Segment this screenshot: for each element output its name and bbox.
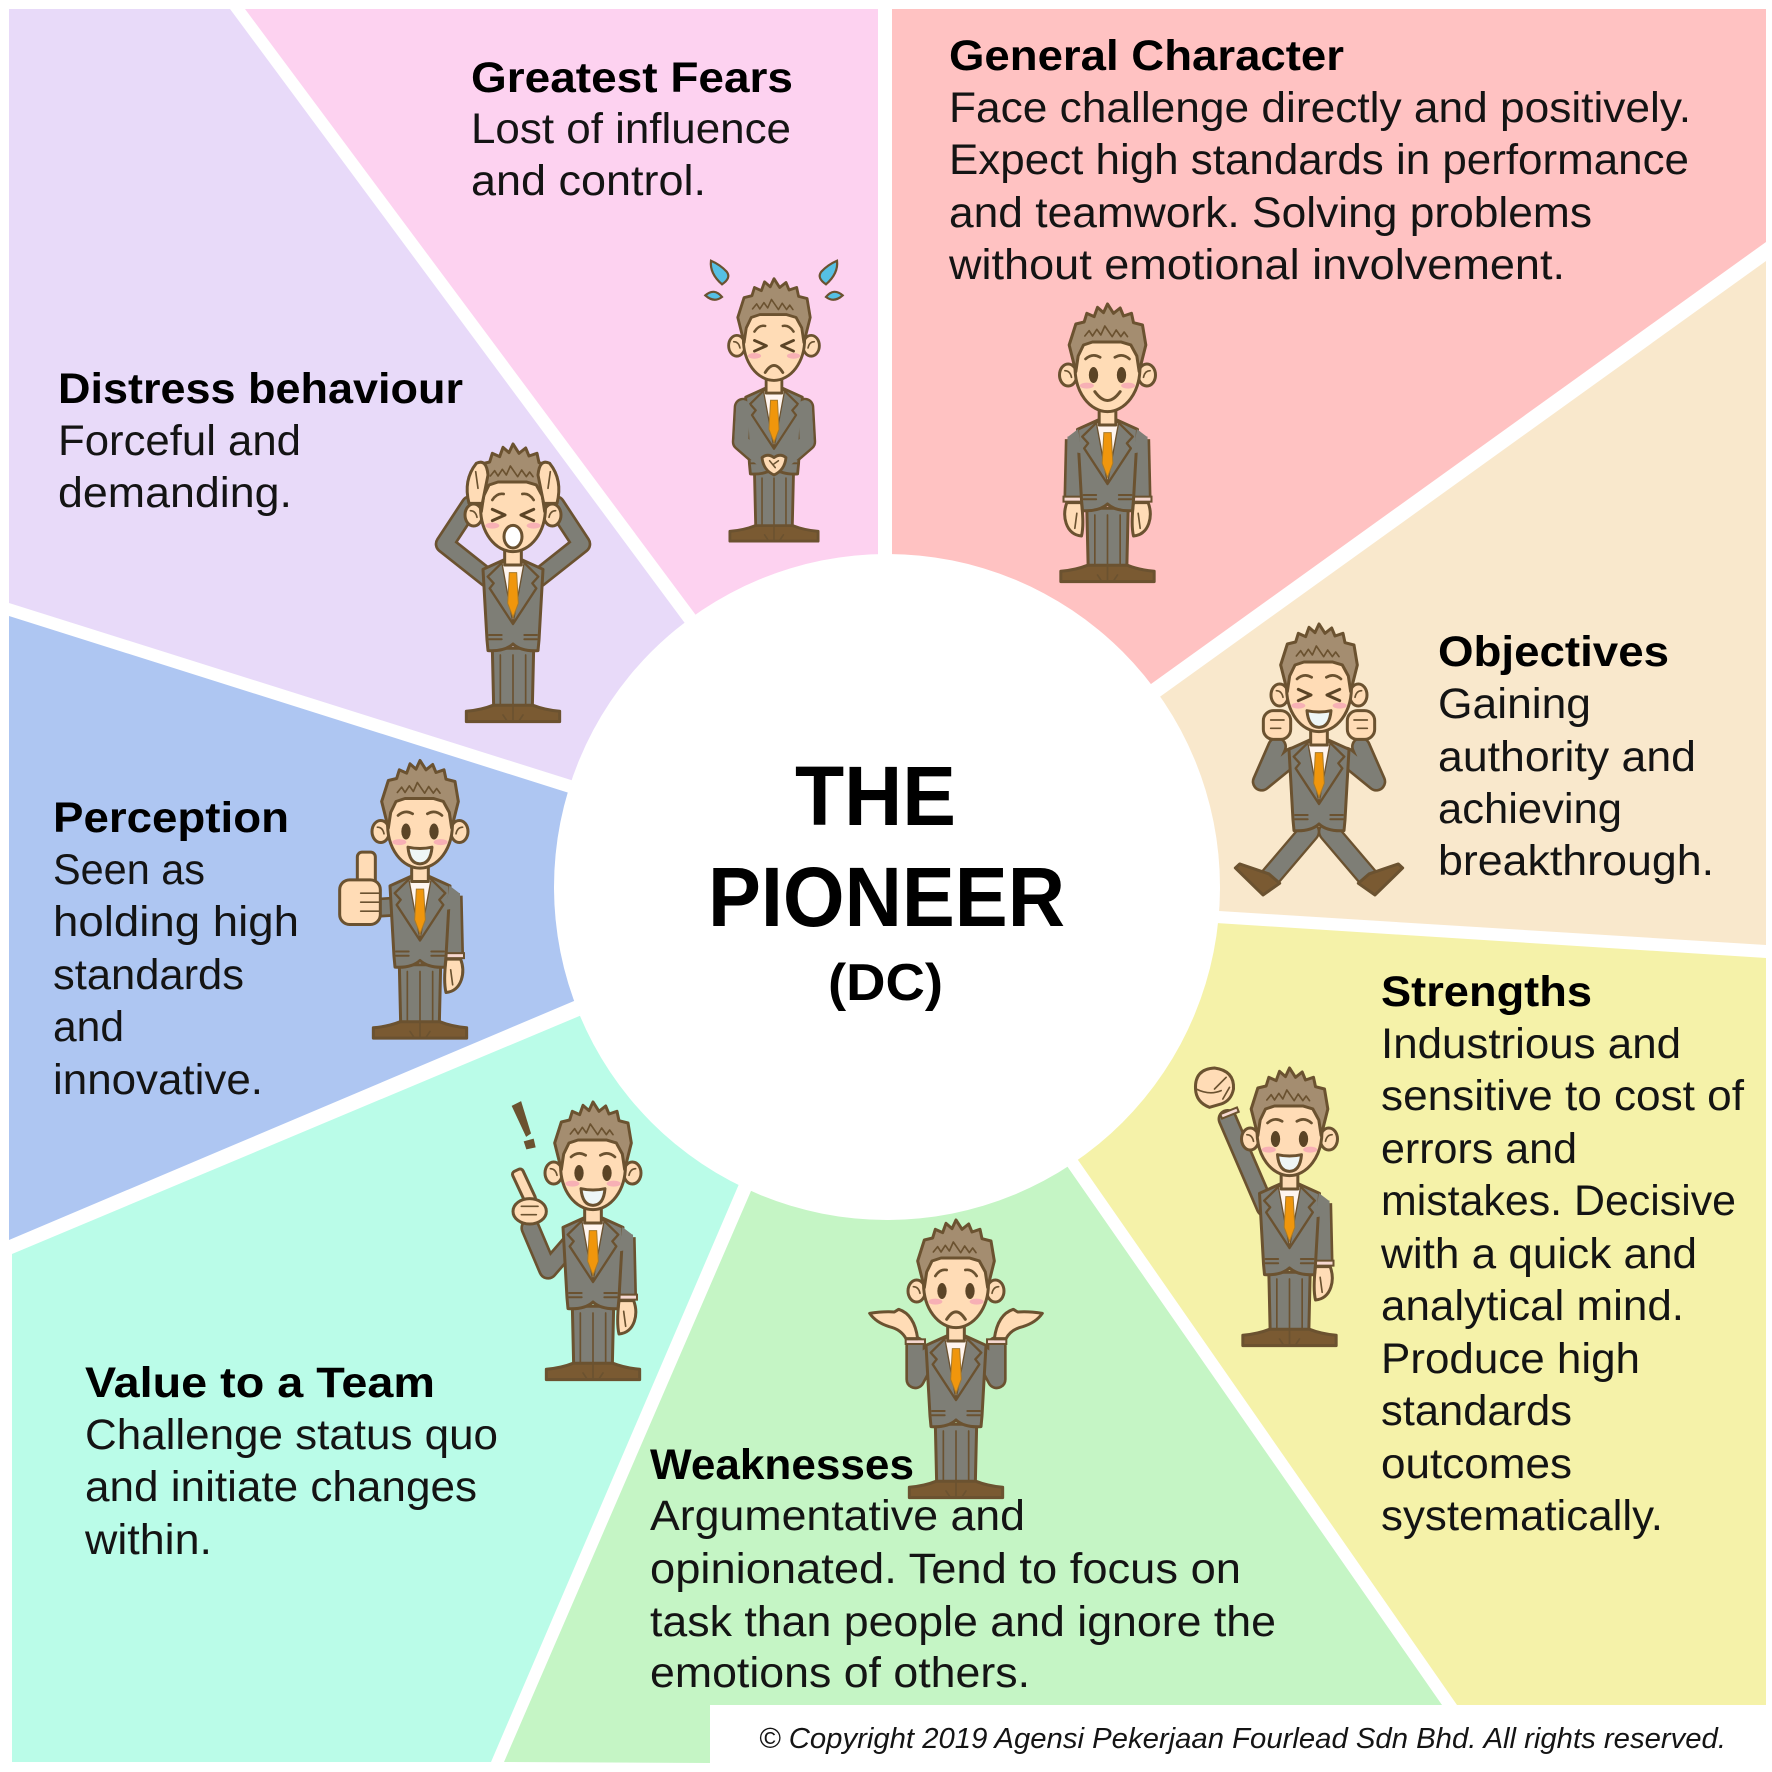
panel: value to a team background xyxy=(12,887,887,1762)
text: strengths: standards xyxy=(1381,1387,1572,1435)
text: greatest fears: and control. xyxy=(471,157,706,205)
text: general character: Face challenge directly and positively. xyxy=(949,84,1691,132)
text: value to a team: within. xyxy=(84,1516,212,1564)
icon: jumping businessman with fists, objectives xyxy=(1235,624,1403,895)
text: perception: Seen as xyxy=(53,846,205,894)
text: strengths: outcomes xyxy=(1381,1440,1572,1488)
text: weaknesses xyxy=(650,1441,1276,1697)
text: greatest fears xyxy=(471,54,793,205)
text: objectives: breakthrough. xyxy=(1438,837,1714,885)
icon: shrugging businessman, weaknesses xyxy=(870,1220,1042,1498)
panel: strengths background xyxy=(887,887,1766,1705)
icon: businessman pointing up with exclamation mark, value to a team xyxy=(511,1100,641,1380)
text: perception: Perception xyxy=(53,794,289,842)
text: weaknesses: Weaknesses xyxy=(650,1441,914,1489)
text: strengths: analytical mind. xyxy=(1381,1282,1684,1330)
text: strengths: mistakes. Decisive xyxy=(1381,1177,1736,1225)
text: weaknesses: Argumentative and xyxy=(650,1492,1025,1540)
copyright bar: © Copyright 2019 Agensi Pekerjaan Fourlead Sdn Bhd. All rights reserved. xyxy=(759,1723,1726,1755)
text: general character: General Character xyxy=(949,32,1344,80)
icon: smiling businessman, general character xyxy=(1060,304,1155,582)
text: distress behaviour: Distress behaviour xyxy=(58,365,463,413)
panel: objectives background xyxy=(887,261,1766,945)
icon: worried businessman with sweat drops, greatest fears xyxy=(705,261,843,541)
text: objectives: achieving xyxy=(1438,785,1622,833)
text: objectives xyxy=(1438,628,1714,885)
icon: businessman giving thumbs up, perception xyxy=(340,760,468,1038)
text: perception: and xyxy=(53,1003,124,1051)
text: perception xyxy=(53,794,299,1104)
text: strengths: Industrious and xyxy=(1381,1020,1681,1068)
copyright bar xyxy=(710,1705,1772,1772)
text: distress behaviour xyxy=(58,365,463,517)
text: general character: Expect high standards in performance xyxy=(949,136,1689,184)
text: value to a team: and initiate changes xyxy=(85,1463,477,1511)
text: greatest fears: Lost of influence xyxy=(471,105,791,153)
text: strengths: sensitive to cost of xyxy=(1381,1072,1745,1120)
text: value to a team xyxy=(84,1359,498,1564)
text: greatest fears: Greatest Fears xyxy=(471,54,793,102)
text: perception: holding high xyxy=(53,898,299,946)
text: strengths: with a quick and xyxy=(1380,1230,1697,1278)
text: value to a team: Challenge status quo xyxy=(85,1411,498,1459)
icon: businessman holding head and shouting, distress behaviour xyxy=(445,444,581,722)
text: distress behaviour: Forceful and xyxy=(58,417,301,465)
icon: businessman raising fist, strengths xyxy=(1195,1068,1337,1346)
center title: THE xyxy=(795,749,956,843)
center title: PIONEER xyxy=(708,850,1065,944)
text: objectives: Objectives xyxy=(1438,628,1669,676)
text: strengths: Strengths xyxy=(1381,968,1592,1016)
panel: perception background xyxy=(9,616,887,1240)
text: strengths: errors and xyxy=(1381,1125,1577,1173)
center title xyxy=(708,749,1065,1012)
panel: distress behaviour background xyxy=(9,9,887,887)
panel: greatest fears background xyxy=(245,9,887,887)
panel: weaknesses background xyxy=(504,887,1442,1763)
text: general character: and teamwork. Solving problems xyxy=(949,189,1592,237)
text: perception: standards xyxy=(53,951,244,999)
text: perception: innovative. xyxy=(53,1056,263,1104)
text: weaknesses: task than people and ignore the xyxy=(650,1598,1276,1646)
text: objectives: Gaining xyxy=(1438,680,1591,728)
text: objectives: authority and xyxy=(1438,733,1696,781)
text: distress behaviour: demanding. xyxy=(58,469,292,517)
center title: (DC) xyxy=(828,954,943,1012)
panel: general character background xyxy=(887,9,1766,887)
text: general character xyxy=(948,32,1691,289)
text: general character: without emotional involvement. xyxy=(948,241,1565,289)
text: value to a team: Value to a Team xyxy=(85,1359,435,1407)
text: weaknesses: opinionated. Tend to focus on xyxy=(650,1545,1241,1593)
text: weaknesses: emotions of others. xyxy=(650,1649,1030,1697)
text: strengths xyxy=(1380,968,1745,1540)
central white circle xyxy=(554,554,1220,1220)
text: strengths: systematically. xyxy=(1381,1492,1663,1540)
text: strengths: Produce high xyxy=(1381,1335,1640,1383)
